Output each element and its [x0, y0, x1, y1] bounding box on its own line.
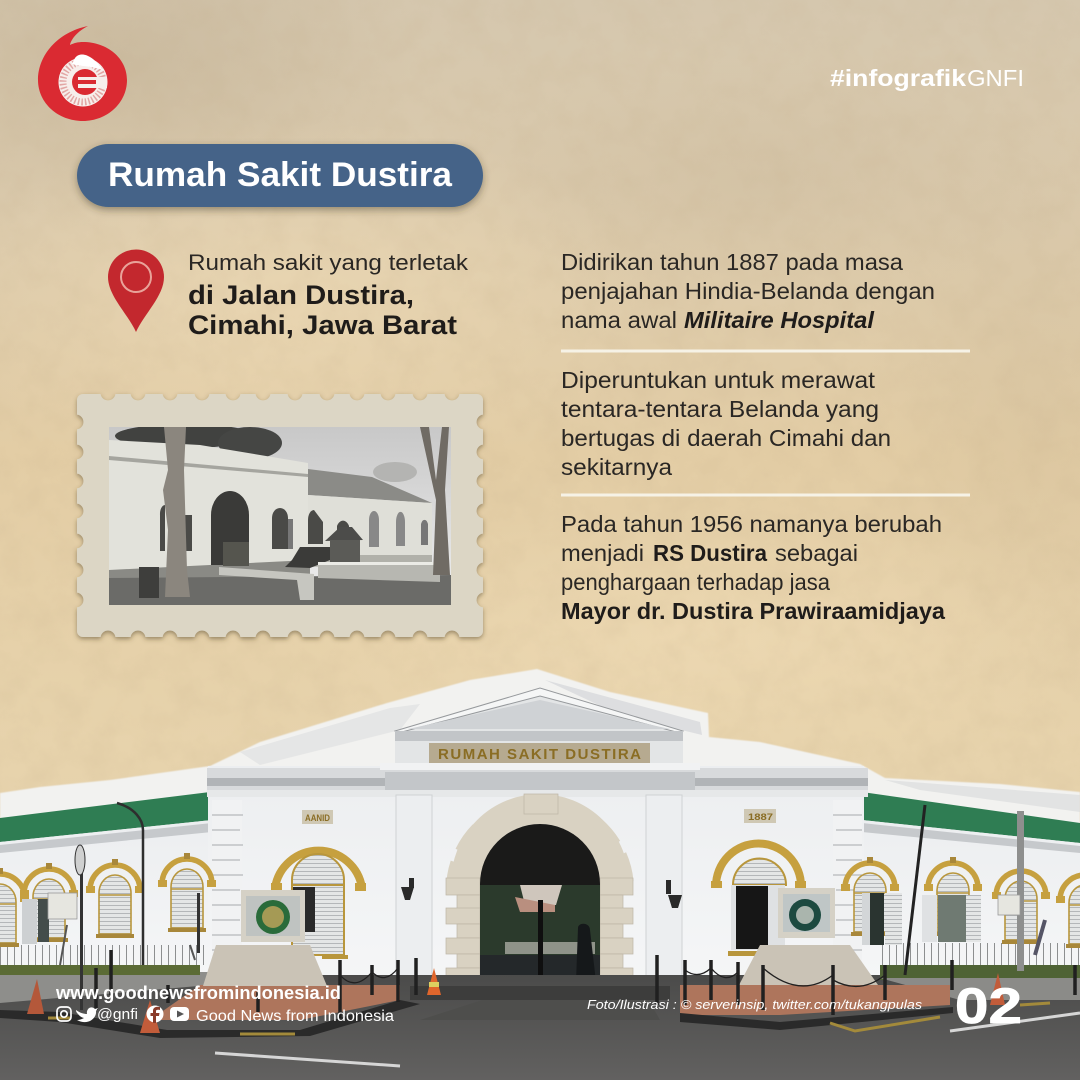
- icon: facebook: [146, 1006, 164, 1023]
- monuments: [203, 888, 878, 986]
- archival photo of hospital: [109, 424, 451, 605]
- fact block 3: [561, 511, 945, 624]
- fact block 3: Mayor dr. Dustira Prawiraamidjaya: [561, 598, 945, 624]
- bollards and chains: [96, 950, 1075, 1018]
- icon: twitter: [76, 1007, 98, 1022]
- street furniture: [48, 803, 1045, 1010]
- pilasters and corner quoins: [212, 795, 862, 987]
- year plaques: 1887: [748, 812, 773, 822]
- icon: instagram: [57, 1007, 71, 1021]
- website and social: www.goodnewsfromindonesia.id: [55, 983, 341, 1003]
- wall lamps: [401, 878, 682, 908]
- website and social: Good News from Indonesia: [196, 1008, 394, 1025]
- fact block 2: [561, 367, 891, 480]
- icon: location pin: [108, 250, 164, 332]
- left wing windows: [0, 853, 216, 947]
- fact block 2: sekitarnya: [561, 454, 672, 480]
- location text: [188, 250, 469, 340]
- traffic cones: [27, 968, 1005, 1033]
- building photo panel: [0, 669, 1080, 1080]
- fact block 1: Didirikan tahun 1887 pada masa: [561, 249, 903, 275]
- fact block 1: [561, 249, 935, 333]
- year plaques: [302, 809, 776, 824]
- central block: [208, 766, 864, 986]
- location text: di Jalan Dustira,: [188, 280, 414, 310]
- hashtag: #infografik: [830, 65, 966, 91]
- fact block 3: RS Dustira: [653, 540, 767, 566]
- central arched gate: [446, 794, 633, 987]
- fact block 1: penjajahan Hindia-Belanda dengan: [561, 278, 935, 304]
- fact block 1: nama awal: [561, 307, 677, 333]
- year plaques: AANID: [305, 813, 330, 823]
- fact block 2: Diperuntukan untuk merawat: [561, 367, 876, 393]
- fact block 1: Militaire Hospital: [684, 307, 875, 333]
- location text: Rumah sakit yang terletak: [188, 250, 469, 275]
- title pill: Rumah Sakit Dustira: [108, 156, 453, 194]
- photo credit: Foto/Ilustrasi : © serverinsip, twitter.com/tukangpulas: [587, 997, 923, 1012]
- road markings: [48, 1003, 1080, 1066]
- website and social: [55, 983, 394, 1025]
- ground: [0, 975, 1080, 1080]
- hashtag: GNFI: [967, 65, 1024, 91]
- fact block 2: tentara-tentara Belanda yang: [561, 396, 879, 422]
- fact block 2: bertugas di daerah Cimahi dan: [561, 425, 891, 451]
- pediment and sign: RUMAH SAKIT DUSTIRA: [438, 746, 641, 763]
- hashtag: [830, 65, 1024, 91]
- stamp photo frame: [74, 393, 486, 642]
- page number: 02: [955, 978, 1022, 1034]
- icon: youtube: [170, 1007, 189, 1021]
- green roofs: [0, 792, 212, 842]
- side wings: [0, 820, 212, 975]
- fact block 3: sebagai: [775, 540, 858, 566]
- logo: GNFI red comma with garuda G: [38, 26, 127, 121]
- fact block 3: Pada tahun 1956 namanya berubah: [561, 511, 942, 537]
- right wing windows: [841, 857, 1080, 948]
- fact block 3: penghargaan terhadap jasa: [561, 569, 830, 595]
- location text: Cimahi, Jawa Barat: [188, 310, 457, 340]
- torn paper edge: [0, 669, 1080, 860]
- pediment and sign: [380, 688, 700, 790]
- main windows: [271, 844, 806, 959]
- fact block 3: menjadi: [561, 540, 644, 566]
- title pill: [77, 144, 483, 207]
- website and social: @gnfi: [97, 1007, 138, 1023]
